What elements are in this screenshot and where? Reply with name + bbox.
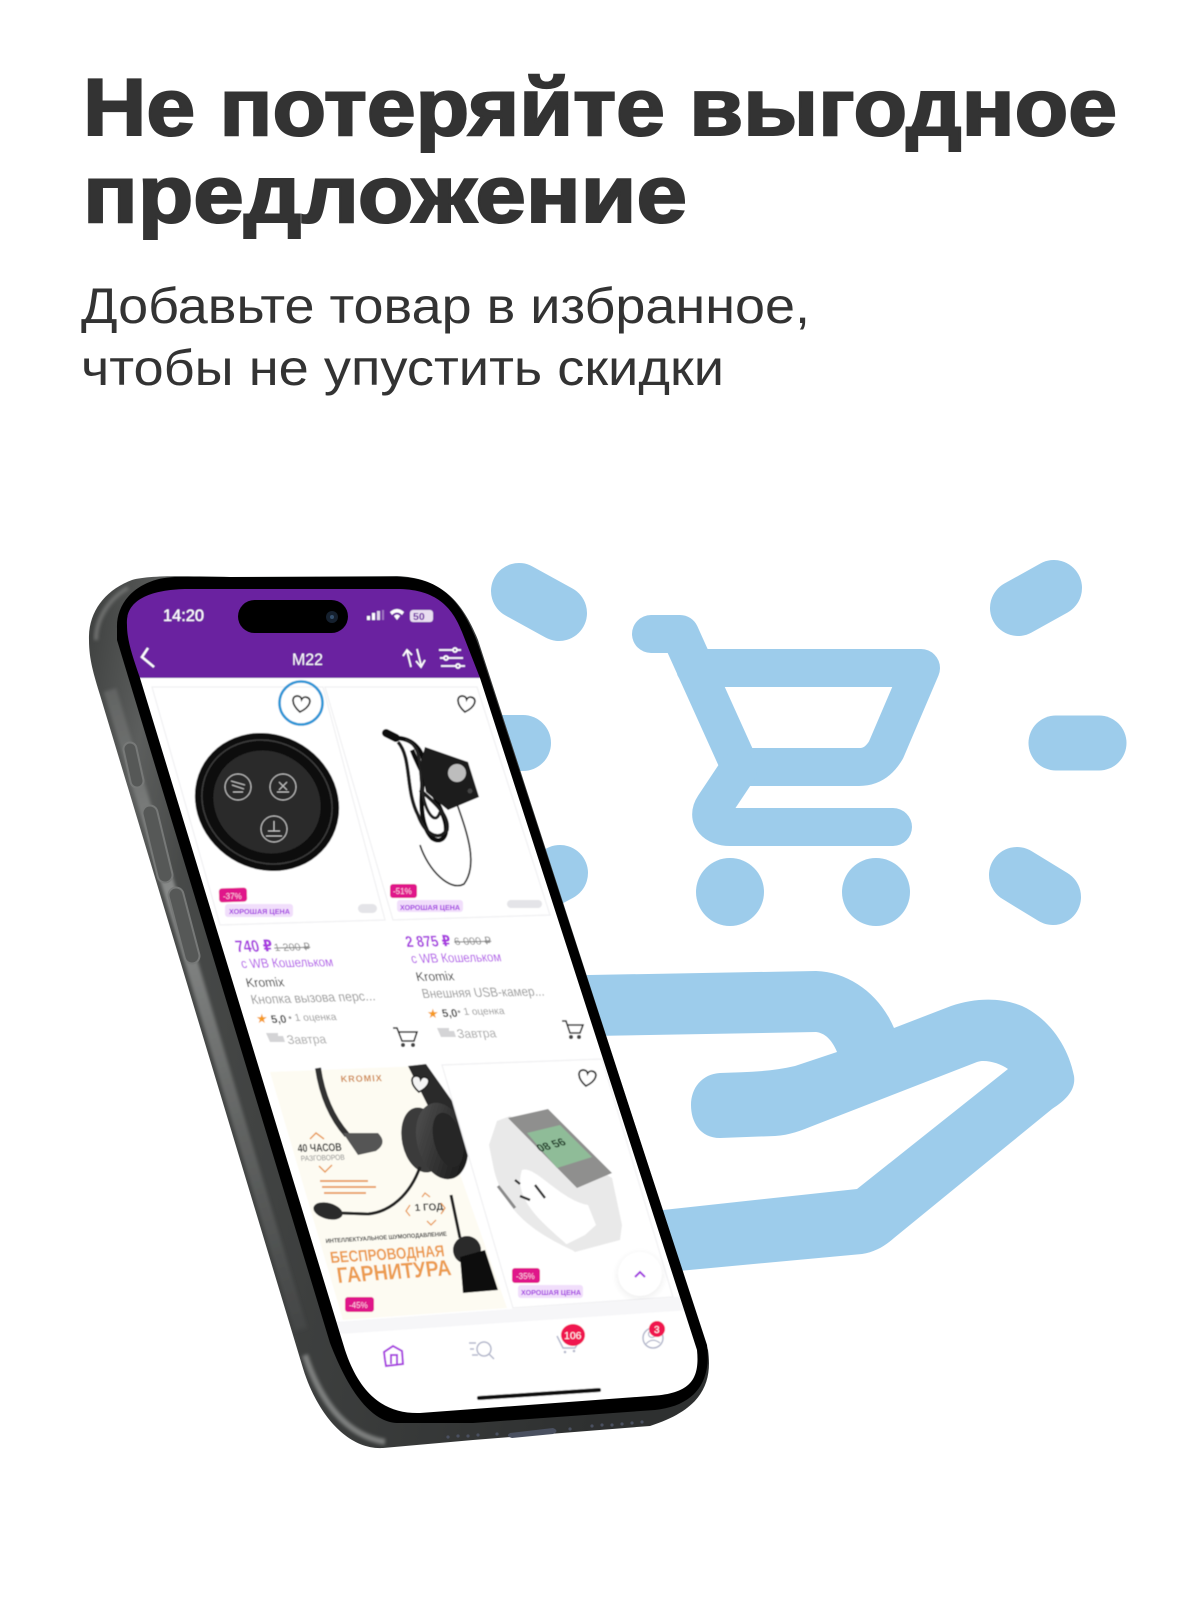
phone (89, 570, 720, 1448)
cart icons (393, 1021, 583, 1046)
product card 3: headset (270, 1064, 507, 1320)
brand label: KROMIX (340, 1073, 383, 1084)
home icon (384, 1346, 403, 1366)
product 1 details: Kromix (244, 975, 286, 990)
product 2 details: Внешняя USB-камер... (420, 984, 546, 1001)
USB camera product (386, 733, 479, 886)
good price badge (225, 904, 293, 917)
cart tab icon: 106 (564, 1330, 582, 1342)
title (83, 63, 1117, 240)
discount badge: -51% (393, 887, 412, 896)
product 2 details: • 1 оценка (456, 1006, 506, 1018)
product 1 details: 1 200 ₽ (273, 941, 312, 954)
headset captions: ИНТЕЛЛЕКТУАЛЬНОЕ ШУМОПОДАВЛЕНИЕ (325, 1232, 447, 1245)
cart tab icon (557, 1324, 585, 1353)
product 2 details: 5,0 (441, 1008, 459, 1020)
discount badge (390, 884, 417, 898)
headset image (311, 1064, 498, 1293)
subtitle: чтобы не упустить скидки (81, 340, 724, 396)
headset captions: РАЗГОВОРОВ (300, 1153, 345, 1163)
status bar time: 14:20 (163, 607, 204, 625)
frame highlights (96, 588, 385, 1442)
good price badge: ХОРОШАЯ ЦЕНА (400, 903, 460, 912)
product 1 details: с WB Кошельком (239, 954, 335, 971)
call button product (194, 732, 340, 872)
profile tab icon (643, 1321, 665, 1348)
icon: cart on open hand with rays (480, 588, 1099, 1282)
product 1 details: Завтра (285, 1032, 329, 1047)
product 2 details: Kromix (414, 969, 456, 984)
heart icon (577, 1069, 596, 1087)
discount badge (512, 1268, 540, 1283)
discount badge (219, 888, 247, 902)
back arrow (142, 648, 154, 667)
title: Не потеряйте выгодное (83, 63, 1117, 153)
product 2 details: с WB Кошельком (409, 949, 503, 966)
good price badge (518, 1285, 583, 1298)
shopping cart (651, 634, 921, 827)
heart icon (456, 695, 475, 713)
black bezel (117, 577, 708, 1423)
product 1 details: • 1 оценка (287, 1012, 338, 1024)
screen (126, 589, 698, 1413)
purple app header (126, 589, 480, 679)
product 2 details: 6 000 ₽ (453, 935, 493, 948)
title: предложение (83, 150, 687, 240)
product 1 details: ★ (256, 1011, 268, 1026)
headset captions: 1 ГОД (414, 1202, 444, 1214)
sort and filter icons (403, 648, 465, 668)
search icon (469, 1342, 494, 1359)
favourite highlight circle (280, 682, 322, 724)
screen background (140, 677, 698, 1413)
header label: M22 (292, 651, 323, 669)
headset captions: БЕСПРОВОДНАЯ (329, 1242, 446, 1267)
discount badge: -45% (349, 1301, 368, 1310)
side buttons (130, 749, 192, 956)
product card 4: wrist pager (442, 1059, 673, 1308)
status icons: 50 (413, 611, 425, 623)
subtitle: Добавьте товар в избранное, (81, 278, 810, 334)
product 2 details: ★ (427, 1006, 439, 1021)
product 1 details (233, 936, 377, 1047)
home indicator (479, 1390, 599, 1398)
dynamic island (238, 600, 348, 633)
good price badge: ХОРОШАЯ ЦЕНА (229, 907, 290, 916)
ray strokes (490, 588, 1099, 897)
product 1 details: 5,0 (270, 1014, 288, 1026)
wrist pager image: 08 56 (534, 1136, 569, 1154)
product 2 details (404, 933, 546, 1041)
headset captions (297, 1133, 453, 1288)
scroll to top button (618, 1270, 662, 1298)
discount badge: -35% (516, 1272, 535, 1281)
bottom port and speaker (446, 1420, 644, 1439)
product 1 details: Кнопка вызова перс... (249, 988, 377, 1007)
discount badge (345, 1297, 374, 1312)
product 2 details: 2 875 ₽ (404, 933, 453, 951)
product card 2 (325, 687, 550, 920)
open hand (480, 971, 1074, 1282)
wrist pager image (489, 1109, 622, 1252)
tab bar (335, 1296, 690, 1398)
product 1 details: 740 ₽ (233, 936, 275, 956)
cart wheels (696, 858, 910, 926)
discount badge: -37% (223, 892, 242, 901)
headset captions: 40 ЧАСОВ (297, 1142, 342, 1155)
heart icon (410, 1075, 429, 1093)
product 2 details: Завтра (455, 1026, 499, 1041)
profile tab icon: 3 (654, 1325, 660, 1336)
status icons (367, 609, 433, 623)
product card 1 (152, 687, 385, 925)
subtitle (81, 278, 810, 396)
headset captions: ГАРНИТУРА (335, 1255, 453, 1288)
good price badge: ХОРОШАЯ ЦЕНА (521, 1288, 581, 1297)
phone metal frame (89, 576, 709, 1448)
